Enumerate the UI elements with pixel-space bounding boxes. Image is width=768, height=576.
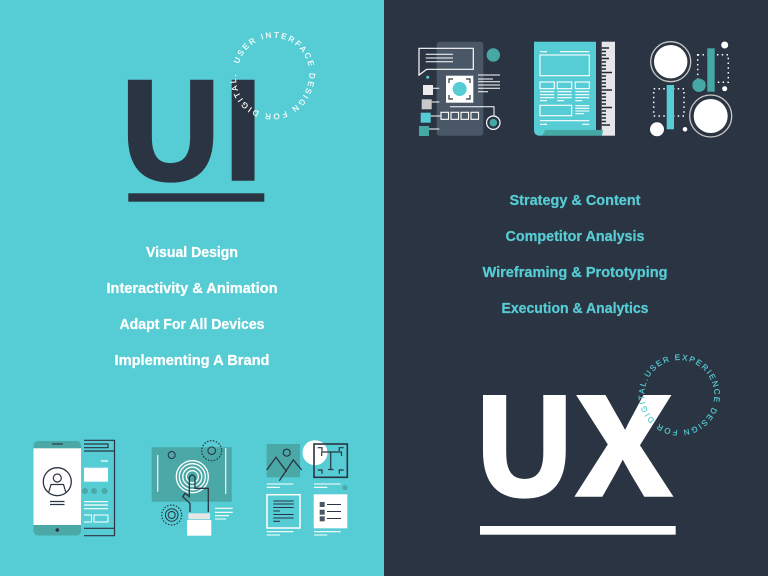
icon: blueprint and ruler	[534, 42, 615, 136]
icon: sliders	[650, 42, 732, 137]
UX heading	[472, 341, 673, 535]
panel: UX	[418, 41, 732, 535]
icon: content layout	[267, 440, 348, 535]
UX list: Wireframing & Prototyping	[482, 265, 668, 281]
UX heading: X	[574, 341, 673, 535]
icon: touch gesture	[152, 441, 233, 536]
UX list: Competitor Analysis	[506, 229, 644, 245]
UI list: Adapt For All Devices	[120, 317, 264, 333]
UI list: Visual Design	[146, 245, 238, 261]
UX underline	[480, 526, 676, 535]
UI list: Interactivity & Animation	[106, 281, 278, 297]
UX list: Execution & Analytics	[502, 301, 648, 317]
UX heading: U	[472, 341, 577, 535]
panel: UI	[0, 0, 384, 576]
UI heading: I	[220, 25, 266, 218]
UI list: Implementing A Brand	[114, 353, 270, 369]
UX list: Strategy & Content	[510, 193, 641, 209]
circular text: UI: USER INTERFACE DESIGN FOR DIGITAL.	[230, 32, 316, 120]
circular text: UX: USER EXPERIENCE DESIGN FOR DIGITAL.	[638, 354, 720, 436]
UI list	[106, 245, 278, 369]
UX list	[482, 193, 668, 317]
UI heading: U	[117, 25, 225, 218]
icon: wireframe screen	[419, 42, 500, 136]
UI underline	[128, 193, 264, 202]
icon: mobile profile	[34, 440, 114, 536]
